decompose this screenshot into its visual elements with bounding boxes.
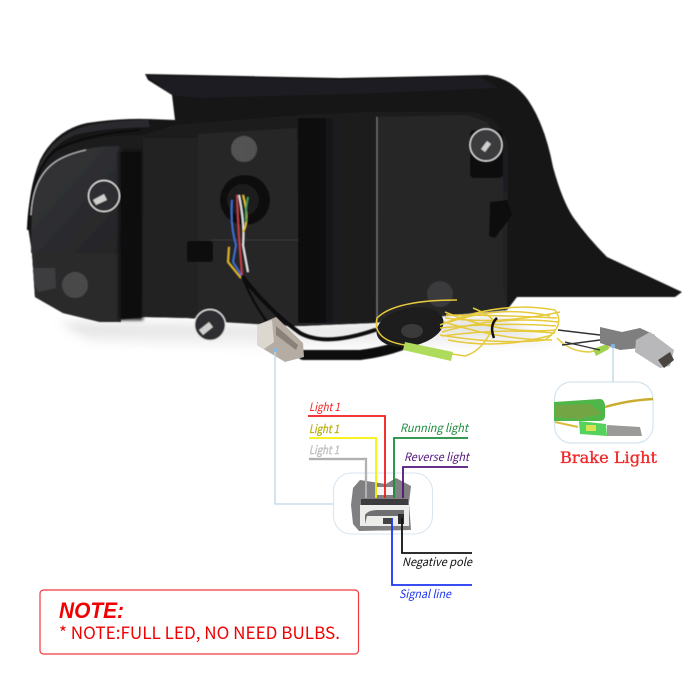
left cap highlight xyxy=(31,150,86,215)
connector xyxy=(351,478,411,531)
vents xyxy=(62,136,453,307)
right side clip xyxy=(489,200,512,238)
harness wires xyxy=(228,195,248,278)
outer flange xyxy=(28,74,682,326)
wire: reverse light xyxy=(403,467,468,498)
flange top band xyxy=(148,76,498,98)
wire: yellow light 1 xyxy=(309,438,376,498)
wire: grey light 1 outline xyxy=(309,459,366,498)
rectangular hole xyxy=(187,241,213,262)
label: running light: Running light xyxy=(400,420,470,436)
dark column xyxy=(298,118,376,323)
wire: running light xyxy=(394,438,468,498)
mounting studs xyxy=(88,129,503,340)
label: signal line: Signal line xyxy=(399,586,453,602)
left cap lens stub xyxy=(33,268,56,292)
small green terminal xyxy=(593,344,609,356)
right panel xyxy=(378,115,507,322)
left cap rim xyxy=(28,130,140,230)
green terminal xyxy=(403,342,453,361)
side panel xyxy=(143,138,198,316)
wire: red light 1 xyxy=(308,416,385,498)
yellow wire bundle and grommet xyxy=(373,300,610,361)
harness sleeve xyxy=(243,277,405,355)
label: red light 1: Light 1 xyxy=(309,399,340,415)
note text: * NOTE:FULL LED, NO NEED BULBS. xyxy=(59,619,340,644)
wire: negative pole xyxy=(402,518,472,553)
tail light housing xyxy=(28,74,682,355)
right wing of flange xyxy=(525,120,672,296)
note heading: NOTE: xyxy=(59,598,124,623)
brake light label: Brake Light xyxy=(560,448,658,467)
label: reverse light: Reverse light xyxy=(404,449,471,465)
centre panel xyxy=(198,128,300,326)
label: grey light 1: Light 1 xyxy=(309,442,339,458)
left cap lower xyxy=(32,253,121,322)
pinout inset frame xyxy=(334,473,432,534)
metal pin xyxy=(607,425,642,436)
leader line: plug to pinout xyxy=(273,348,333,504)
recessed channel xyxy=(119,150,143,320)
left cap upper lip xyxy=(36,120,150,175)
zip tie xyxy=(492,318,497,338)
small green terminal xyxy=(579,421,607,436)
label: negative pole: Negative pole xyxy=(402,554,474,570)
leader line: brake light xyxy=(611,344,615,382)
grey plug connector xyxy=(257,317,304,362)
bulb socket xyxy=(220,175,270,225)
large green terminal xyxy=(554,399,605,421)
panel edge highlight xyxy=(376,117,378,322)
brake light inset xyxy=(554,382,653,443)
note box xyxy=(40,590,358,654)
wire: signal line xyxy=(392,518,472,585)
right wires and plug xyxy=(558,327,674,368)
back shell xyxy=(32,112,508,326)
left end cap panel xyxy=(31,146,128,253)
yellow wires xyxy=(605,399,653,407)
wire: grey light 1 xyxy=(309,459,366,498)
label: yellow light 1: Light 1 xyxy=(309,421,339,437)
panel seam xyxy=(210,239,300,241)
floor shadow under lamp xyxy=(60,318,560,352)
